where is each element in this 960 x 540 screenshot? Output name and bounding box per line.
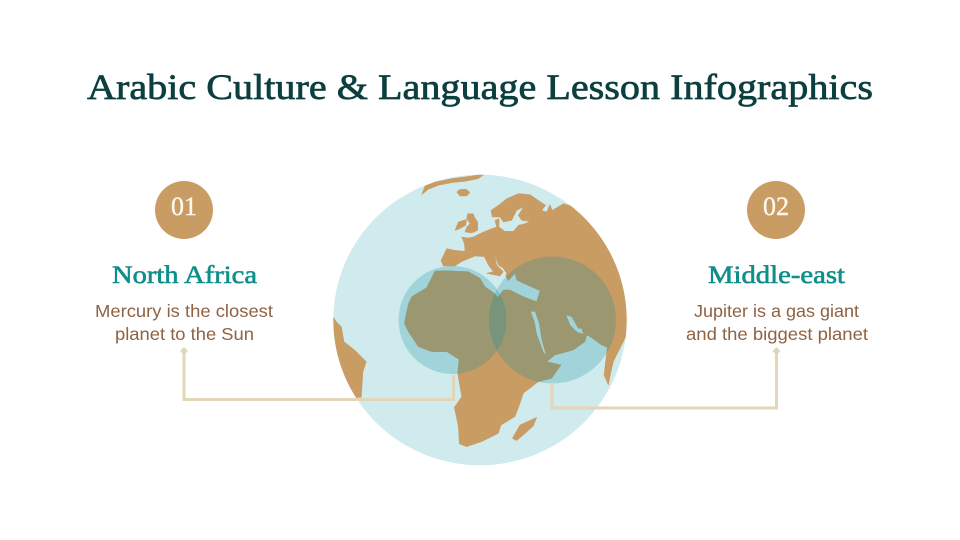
Greenland xyxy=(422,173,486,195)
ocean xyxy=(333,175,627,465)
text: Mercury description xyxy=(95,301,273,344)
connector: North Africa xyxy=(180,347,454,400)
text: Jupiter description xyxy=(686,301,868,344)
number badge 01 xyxy=(155,181,213,239)
Ireland xyxy=(455,219,467,230)
Eurasia and Africa xyxy=(404,193,627,447)
heading: North Africa: North Africa xyxy=(112,262,257,289)
region circle: North Africa xyxy=(398,266,506,374)
panel: North Africa xyxy=(95,181,273,344)
Red Sea xyxy=(531,312,546,355)
South America xyxy=(333,316,367,398)
number badge 02: 02 xyxy=(763,192,789,221)
text: Mercury description: Mercury is the closest xyxy=(95,301,273,321)
Madagascar xyxy=(512,417,537,441)
number badge 01: 01 xyxy=(171,192,197,221)
text: Jupiter description: and the biggest planet xyxy=(686,324,868,344)
heading: Middle-east: Middle-east xyxy=(708,262,845,289)
text: Jupiter description: Jupiter is a gas giant xyxy=(694,301,859,321)
globe map xyxy=(333,174,627,466)
Great Britain xyxy=(465,214,478,233)
panel: Middle-east xyxy=(686,181,868,344)
text: Mercury description: planet to the Sun xyxy=(115,324,254,344)
connector: Middle-east xyxy=(552,347,780,408)
number badge 02 xyxy=(747,181,805,239)
Iceland xyxy=(457,189,470,196)
continents xyxy=(333,174,627,447)
title: Arabic Culture & Language Lesson Infographics xyxy=(87,67,873,107)
region circle: Middle-east xyxy=(489,256,616,384)
